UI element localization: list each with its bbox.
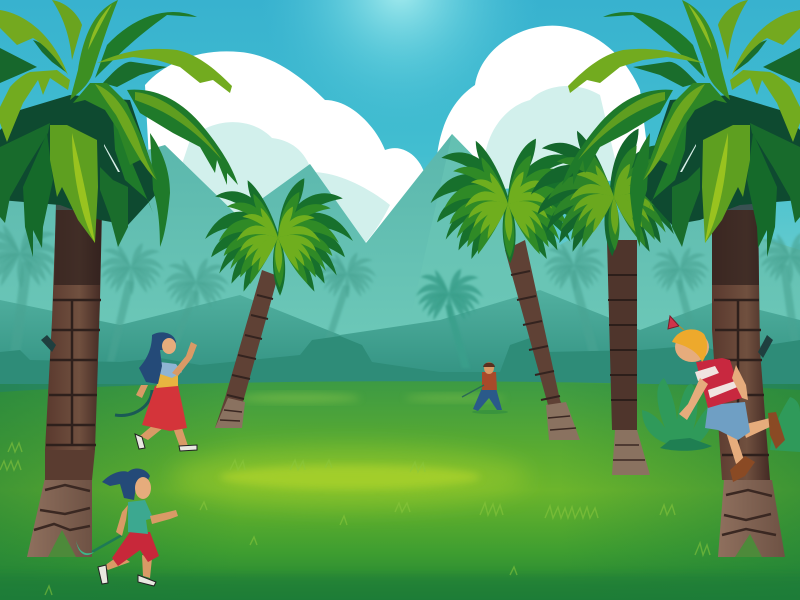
arms	[116, 505, 178, 536]
girl with stick	[76, 469, 178, 586]
crown	[431, 139, 588, 263]
clouds	[145, 26, 650, 243]
crown	[562, 0, 800, 257]
stick	[92, 535, 122, 552]
shirt	[696, 358, 742, 408]
trunk	[607, 240, 637, 430]
trousers	[112, 532, 159, 566]
palm: mid right tall	[531, 129, 691, 475]
cloud: right shading	[485, 86, 620, 190]
palm: far left 3	[164, 258, 229, 345]
trunk base	[718, 480, 785, 557]
face	[162, 338, 176, 354]
hair	[139, 332, 176, 384]
stub	[758, 335, 773, 358]
shirt	[128, 500, 153, 534]
trunk	[505, 240, 575, 440]
small boy in distance	[462, 362, 508, 414]
trunk	[45, 210, 102, 450]
ground highlights	[0, 384, 800, 600]
mountains	[0, 134, 800, 360]
treeline	[0, 336, 800, 395]
shoes	[135, 434, 197, 451]
stub	[41, 335, 56, 352]
palm: center	[416, 269, 483, 368]
legs	[140, 425, 188, 447]
distant hills	[0, 290, 800, 400]
ribbon	[115, 390, 152, 415]
cloud: right	[436, 26, 650, 175]
palm: far right	[758, 233, 800, 350]
skirt	[142, 385, 187, 431]
bush: right edge	[770, 397, 800, 452]
cloud: left shading	[180, 122, 390, 243]
leg	[726, 418, 772, 464]
hair and head	[675, 332, 709, 362]
palm: center left	[318, 252, 377, 340]
grass tufts	[0, 443, 710, 595]
bush: behind boy	[642, 378, 716, 451]
trunk base	[27, 478, 92, 557]
girl in red skirt	[115, 332, 197, 451]
palm: big right	[562, 0, 800, 557]
crown	[205, 178, 353, 296]
flag	[668, 316, 679, 329]
palm: far left	[0, 223, 62, 355]
arm	[679, 365, 748, 420]
blouse	[156, 370, 178, 388]
palm: big left	[0, 0, 238, 557]
face	[135, 477, 151, 499]
legs	[104, 555, 152, 578]
palm: mid left	[205, 178, 353, 428]
crown	[531, 129, 691, 256]
trunk	[215, 270, 278, 428]
cloud: left	[145, 51, 427, 243]
shoes	[730, 412, 785, 482]
palm: mid right	[431, 139, 588, 440]
palm: right far	[544, 243, 605, 365]
hair	[102, 469, 150, 500]
trunk	[712, 210, 770, 480]
background palms	[0, 223, 800, 368]
sky	[0, 0, 800, 340]
shorts	[705, 402, 750, 440]
palm: far left 2	[99, 243, 164, 362]
palm: right far 2	[651, 247, 710, 345]
ground	[0, 381, 800, 600]
crown	[0, 0, 238, 257]
boy climbing tree	[668, 316, 785, 482]
arm	[136, 342, 197, 398]
shoes	[98, 565, 156, 586]
